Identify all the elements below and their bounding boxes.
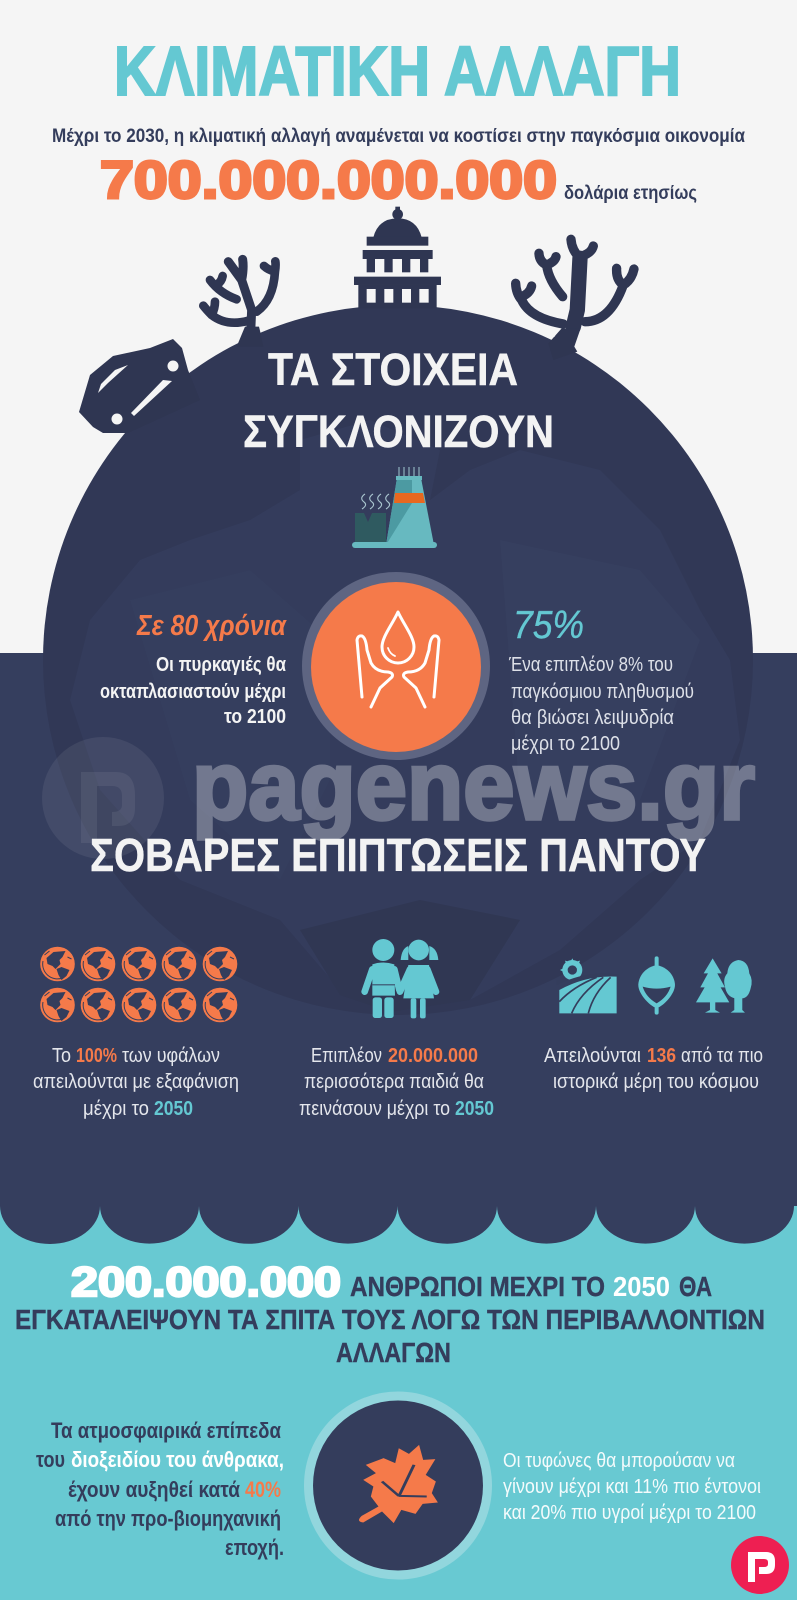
text: hurricanes	[503, 1450, 761, 1524]
watermark	[42, 731, 755, 859]
right stat: water scarcity: Ένα επιπλέον 8% του	[508, 654, 673, 676]
text: hungry children: 2050	[455, 1098, 494, 1120]
text: historic sites: από τα πιο	[681, 1045, 763, 1067]
right stat: water scarcity: παγκόσμιου πληθυσμού	[511, 681, 694, 703]
heading: the facts are shocking: ΤΑ ΣΤΟΙΧΕΙΑ	[268, 344, 518, 395]
heading: the facts are shocking: ΣΥΓΚΛΟΝΙΖΟΥΝ	[243, 406, 554, 457]
text: historic sites: 136	[647, 1045, 676, 1067]
left stat: wildfires: οκταπλασιαστούν μέχρι	[100, 681, 286, 703]
right stat: water scarcity	[508, 604, 694, 755]
text: reefs	[33, 1045, 239, 1120]
text: atmospheric CO2: Τα ατμοσφαιρικά επίπεδα	[51, 1418, 281, 1443]
scalloped edge	[0, 1200, 797, 1244]
right stat: water scarcity: θα βιώσει λειψυδρία	[511, 707, 674, 729]
icon: field with sun	[557, 958, 618, 1013]
icon: children	[365, 939, 438, 1018]
text: atmospheric CO2: εποχή.	[225, 1535, 284, 1560]
text: reefs: μέχρι το	[83, 1098, 149, 1120]
text: hurricanes: και 20% πιο υγροί μέχρι το 2100	[503, 1502, 756, 1524]
icon: acorn	[638, 958, 675, 1013]
heading: the facts are shocking	[243, 344, 554, 457]
icon: domed building	[354, 207, 441, 308]
centre circle with hands and water drop	[302, 572, 490, 760]
heading: 200 million people displaced: 2050	[613, 1271, 670, 1302]
planet globe	[43, 305, 753, 1015]
icon: car on the planet	[79, 339, 200, 433]
right stat: water scarcity: 75%	[513, 604, 584, 647]
text: atmospheric CO2: 40%	[245, 1477, 281, 1502]
left stat: wildfires	[100, 610, 287, 728]
text: hungry children	[299, 1045, 494, 1120]
big number: annual cost	[100, 151, 697, 210]
centre circle with leaf	[304, 1392, 492, 1580]
heading: 200 million people displaced: ΑΛΛΑΓΩΝ	[336, 1337, 451, 1368]
heading: 200 million people displaced: 200.000.000	[71, 1258, 341, 1305]
text: reefs: Το	[52, 1045, 71, 1067]
text: hungry children: περισσότερα παιδιά θα	[304, 1071, 484, 1093]
text: reefs: των υφάλων	[122, 1045, 220, 1067]
text: atmospheric CO2: διοξειδίου του άνθρακα,	[71, 1447, 284, 1472]
text: reefs: 100%	[76, 1045, 117, 1067]
icon: trees	[696, 958, 752, 1013]
logo	[731, 1536, 789, 1594]
background: teal bottom	[0, 1206, 797, 1600]
background: light top	[0, 0, 797, 653]
icon: bare tree right	[516, 239, 634, 360]
text: hungry children: πεινάσουν μέχρι το	[299, 1098, 450, 1120]
text: atmospheric CO2: έχουν αυξηθεί κατά	[68, 1477, 240, 1502]
text: reefs: απειλούνται με εξαφάνιση	[33, 1071, 239, 1093]
left stat: wildfires: το 2100	[224, 706, 286, 728]
right stat: water scarcity: μέχρι το 2100	[511, 733, 620, 755]
big number: annual cost: δολάρια ετησίως	[564, 183, 697, 204]
text: hurricanes: γίνουν μέχρι και 11% πιο έντονοι	[503, 1476, 761, 1498]
watermark: pagenews.gr	[192, 731, 755, 840]
left stat: wildfires: Σε 80 χρόνια	[136, 610, 287, 642]
heading: 200 million people displaced	[15, 1258, 765, 1368]
heading: serious effects everywhere: ΣΟΒΑΡΕΣ ΕΠΙΠΤΩΣΕΙΣ ΠΑΝΤΟΥ	[90, 829, 706, 881]
text: reefs: 2050	[154, 1098, 193, 1120]
heading: 200 million people displaced: ΘΑ	[679, 1271, 712, 1302]
text: historic sites: Απειλούνται	[544, 1045, 641, 1067]
background: navy band	[0, 653, 797, 1206]
icon: water drop and hands	[357, 612, 439, 707]
text: hungry children: Επιπλέον	[311, 1045, 382, 1067]
text: hurricanes: Οι τυφώνες θα μπορούσαν να	[503, 1450, 735, 1472]
big number: annual cost: 700.000.000.000	[100, 151, 557, 210]
text: hungry children: 20.000.000	[388, 1045, 478, 1067]
text: atmospheric CO2: του	[36, 1447, 65, 1472]
icon: maple leaf	[359, 1445, 438, 1523]
text: historic sites	[544, 1045, 763, 1093]
icon: grid of ten globes	[40, 947, 237, 1022]
title: ΚΛΙΜΑΤΙΚΗ ΑΛΛΑΓΗ	[114, 32, 681, 110]
text: atmospheric CO2	[36, 1418, 284, 1560]
icon: bare tree left	[203, 259, 276, 347]
text: historic sites: ιστορικά μέρη του κόσμου	[553, 1071, 759, 1093]
heading: 200 million people displaced: ΑΝΘΡΩΠΟΙ ΜΕΧΡΙ ΤΟ	[350, 1271, 605, 1302]
text: atmospheric CO2: από την προ-βιομηχανική	[55, 1506, 281, 1531]
icon: factory	[352, 467, 437, 548]
left stat: wildfires: Οι πυρκαγιές θα	[156, 654, 287, 676]
